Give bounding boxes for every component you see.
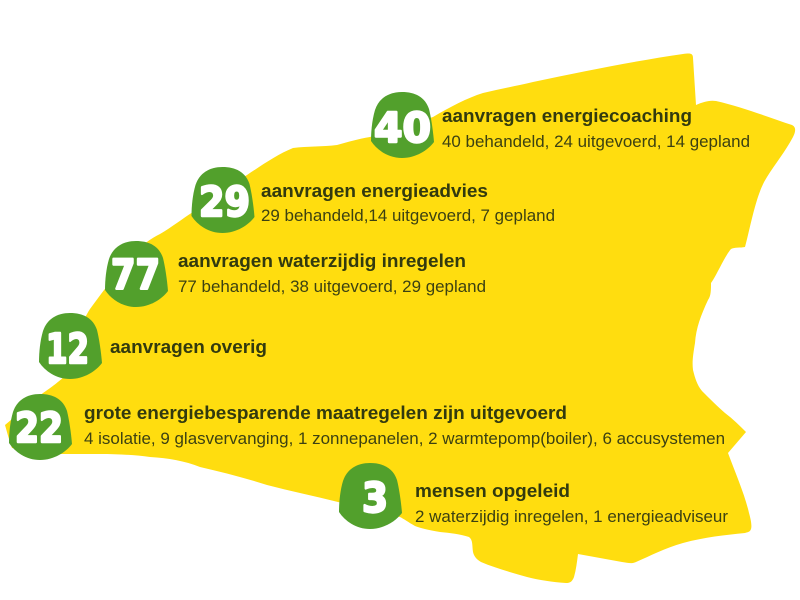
badge: 3	[339, 463, 402, 529]
badge: 40: 40	[374, 104, 431, 152]
heading: overig: aanvragen overig	[110, 336, 267, 357]
details: energieadvies: 29 behandeld,14 uitgevoerd, 7 gepland	[261, 206, 555, 225]
item: opgeleid	[339, 463, 728, 529]
badge: 12	[39, 313, 102, 379]
details: waterzijdig inregelen: 77 behandeld, 38 uitgevoerd, 29 gepland	[178, 277, 486, 296]
details: maatregelen: 4 isolatie, 9 glasvervanging, 1 zonnepanelen, 2 warmtepomp(boiler), 6 accusystemen	[84, 429, 725, 448]
item: waterzijdig inregelen	[105, 241, 486, 307]
badge: 29: 29	[199, 178, 250, 226]
badge: 29	[192, 167, 254, 233]
heading: energieadvies: aanvragen energieadvies	[261, 180, 488, 201]
badge: 77	[105, 241, 168, 307]
item: overig	[39, 313, 267, 379]
badge: 3: 3	[362, 474, 388, 522]
badge: 22	[9, 394, 72, 460]
heading: maatregelen: grote energiebesparende maatregelen zijn uitgevoerd	[84, 402, 567, 423]
badge: 40	[371, 92, 434, 158]
heading: waterzijdig inregelen: aanvragen waterzijdig inregelen	[178, 250, 466, 271]
badge: 77: 77	[111, 251, 160, 299]
badge: 12: 12	[46, 325, 89, 373]
item: maatregelen	[9, 394, 725, 460]
details: opgeleid: 2 waterzijdig inregelen, 1 energieadviseur	[415, 507, 728, 526]
heading: energiecoaching: aanvragen energiecoaching	[442, 105, 692, 126]
item: energiecoaching	[371, 92, 750, 158]
heading: opgeleid: mensen opgeleid	[415, 480, 570, 501]
badge: 22: 22	[15, 404, 63, 452]
details: energiecoaching: 40 behandeld, 24 uitgevoerd, 14 gepland	[442, 132, 750, 151]
item: energieadvies	[192, 167, 555, 233]
